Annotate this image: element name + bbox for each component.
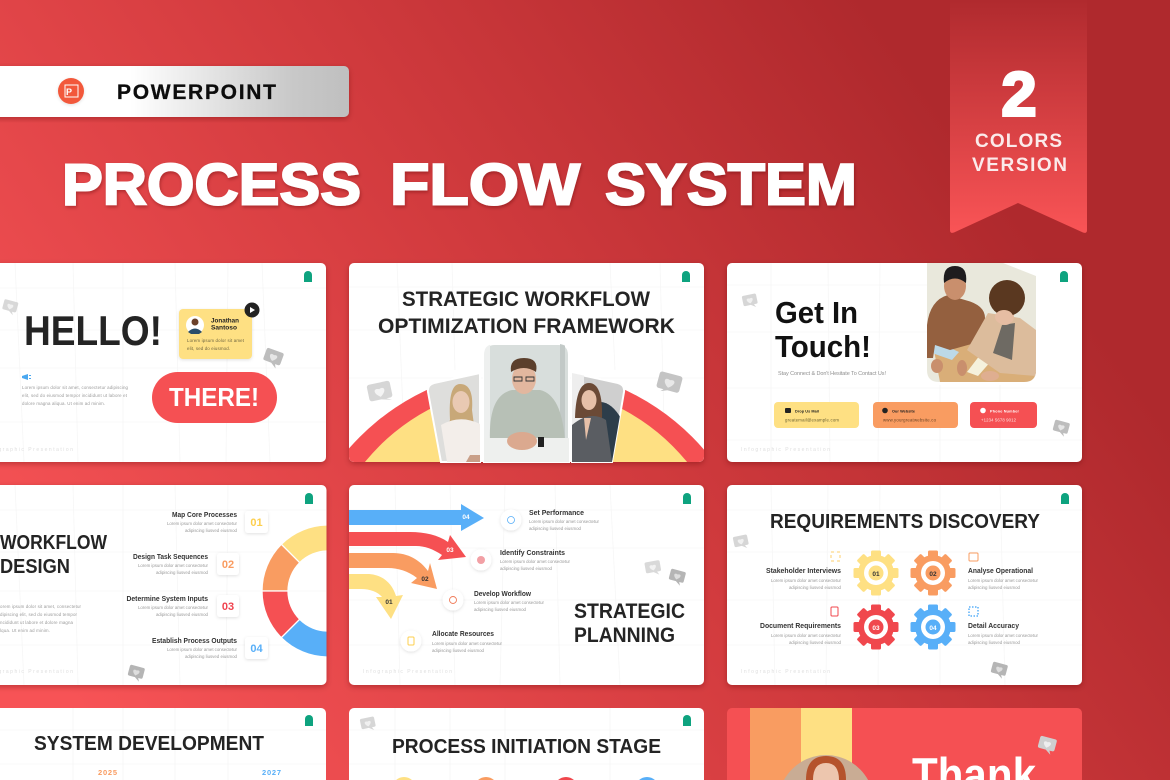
contact: mail: Drop Us Mail [795, 410, 819, 414]
gear 04 [910, 604, 956, 650]
item 02: adipiscing liusved eiusmod [156, 570, 209, 575]
title: PROCESS [62, 152, 361, 218]
heading: HELLO!: HELLO! [24, 307, 162, 354]
contact: website [873, 402, 958, 428]
item 03: 03 [222, 601, 234, 613]
icon: home badge [683, 715, 691, 726]
item 01 [167, 511, 268, 533]
step: Set Performance: Set Performance [529, 510, 584, 517]
text block: intro: Lorem ipsum dolor sit amet, consectetur adipiscing [22, 385, 129, 390]
banner: PowerPoint [0, 66, 349, 117]
ribbon number: 2 [1002, 60, 1036, 130]
panel: Get in touch slide [727, 263, 1082, 462]
item 03: Lorem ipsum dolor amet consectetur [138, 605, 209, 610]
ribbon text [972, 131, 1067, 176]
icon: home badge [305, 715, 313, 726]
item: Document Requirements: Lorem ipsum dolor amet consectetur [771, 633, 842, 638]
footer label: Infographic Presentation [741, 669, 830, 675]
heading: Get In Touch! [775, 295, 871, 364]
item: Stakeholder Interviews [766, 552, 842, 590]
contact: mail [774, 402, 859, 428]
step: Allocate Resources: adipiscing liusved eiusmod [432, 648, 485, 653]
testimonial card: elit, sed do eiusmod. [187, 346, 230, 351]
heading: framework title [378, 287, 675, 338]
icon: home badge [305, 493, 313, 504]
item 02: Design Task Sequences [133, 554, 208, 561]
photo: two colleagues [927, 263, 1036, 382]
heading: PROCESS INITIATION STAGE [392, 736, 661, 758]
heading: Workflow design: WORKFLOW [0, 531, 108, 554]
item 02 [133, 553, 239, 575]
footer label: Infographic Presentation [363, 669, 452, 675]
icon: home badge [682, 271, 690, 282]
arrow 01 yellow: 01 [385, 599, 393, 606]
item 02: Lorem ipsum dolor amet consectetur [138, 563, 209, 568]
icon: speech bubble [1052, 419, 1070, 437]
step: Set Performance: Lorem ipsum dolor amet consectetur [529, 519, 600, 524]
testimonial card: Santoso [211, 326, 237, 332]
panel: Strategic planning slide [349, 485, 704, 685]
heading: framework title: STRATEGIC WORKFLOW [402, 287, 651, 311]
gear 02: 02 [929, 571, 937, 578]
testimonial card: Lorem ipsum dolor sit amet [187, 338, 245, 343]
title [62, 152, 857, 218]
ribbon: 2 colors version [950, 0, 1087, 233]
text block: intro: lqua. Ut enim ad minim. [0, 628, 50, 633]
item: Document Requirements: adipiscing liusved eiusmod [789, 640, 842, 645]
item: Stakeholder Interviews: adipiscing liusved eiusmod [789, 585, 842, 590]
title: SYSTEM [605, 152, 857, 218]
heading: Workflow design [0, 531, 108, 578]
item: Analyse Operational: Analyse Operational [968, 568, 1033, 575]
heading: SYSTEM DEVELOPMENT [34, 733, 264, 755]
gear 03: 03 [872, 625, 880, 632]
panel: Process initiation slide [349, 708, 704, 780]
heading: Get In Touch!: Get In [775, 295, 858, 330]
icon: speech bubble [990, 661, 1008, 679]
arrow 03 red: 03 [446, 547, 454, 554]
item: Stakeholder Interviews: Lorem ipsum dolor amet consectetur [771, 578, 842, 583]
gear 01 [854, 550, 898, 596]
icon: speech bubble [668, 568, 686, 586]
icon: speech bubble [742, 293, 759, 310]
label: POWERPOINT: POWERPOINT [117, 81, 276, 104]
testimonial card: Jonathan [211, 318, 239, 324]
subtitle: Stay Connect & Don't Hesitate To Contact Us! [778, 371, 886, 377]
gear 04: 04 [929, 625, 937, 632]
ribbon text: COLORS [975, 131, 1062, 152]
yellow stripe [801, 708, 852, 780]
step: Allocate Resources: Allocate Resources [432, 631, 494, 638]
item 03 [126, 595, 239, 617]
step: Allocate Resources: Lorem ipsum dolor amet consectetur [432, 641, 503, 646]
icon: home badge [1061, 493, 1069, 504]
panel: Workflow design slide [0, 485, 328, 685]
contact: phone: +1234 5678 9012 [981, 418, 1017, 422]
heading: Strategic planning: STRATEGIC [574, 600, 685, 623]
year 2025: 2025 [98, 768, 117, 777]
item: Analyse Operational [968, 553, 1039, 590]
item: Detail Accuracy: Lorem ipsum dolor amet consectetur [968, 633, 1039, 638]
gear 01: 01 [872, 571, 880, 578]
step: Develop Workflow: Lorem ipsum dolor amet consectetur [474, 600, 545, 605]
step: Set Performance [500, 510, 600, 531]
icon: play button [244, 302, 260, 318]
text block: intro: dolore magna aliqua. Ut enim ad minim. [22, 401, 105, 406]
item 04: Establish Process Outputs [152, 638, 237, 645]
donut chart [262, 525, 328, 657]
step: Identify Constraints [470, 550, 571, 571]
contact: phone [970, 402, 1037, 428]
icon: home badge [304, 271, 312, 282]
item: Detail Accuracy: Detail Accuracy [968, 623, 1019, 630]
step: Identify Constraints: Lorem ipsum dolor amet consectetur [500, 559, 571, 564]
text block: intro [0, 604, 82, 633]
arrow 02 orange: 02 [421, 576, 429, 583]
icon: speech bubble [733, 534, 750, 551]
contact: phone: Phone Number [990, 410, 1020, 414]
title: FLOW [390, 152, 580, 218]
heading: Strategic planning: PLANNING [574, 624, 675, 647]
heading: REQUIREMENTS DISCOVERY [770, 510, 1040, 533]
panel: System development slide [0, 708, 326, 780]
icon: PowerPoint logo [58, 78, 84, 104]
item 02: 02 [222, 559, 234, 571]
gear 03 [854, 604, 898, 650]
item 03: Determine System Inputs [126, 596, 208, 603]
item: Document Requirements [760, 607, 842, 645]
heading: Get In Touch!: Touch! [775, 329, 871, 364]
item 01: Map Core Processes [172, 512, 237, 519]
step: Allocate Resources [400, 630, 503, 653]
item 04 [152, 637, 268, 659]
item: Analyse Operational: adipiscing liusved eiusmod [968, 585, 1021, 590]
panel: Hello slide [0, 263, 326, 462]
icon: speech bubble [1037, 735, 1057, 755]
yellow arc [365, 408, 687, 462]
item 03: adipiscing liusved eiusmod [156, 612, 209, 617]
item 04: 04 [250, 643, 263, 655]
pill: THERE! [152, 372, 277, 423]
item: Detail Accuracy: adipiscing liusved eiusmod [968, 640, 1021, 645]
contact: website: Our Website [892, 410, 915, 414]
footer label: Infographic Presentation [741, 447, 830, 453]
step: Develop Workflow: adipiscing liusved eiusmod [474, 607, 527, 612]
year 2027: 2027 [262, 768, 281, 777]
gear 02 [910, 550, 956, 596]
photo: right woman [572, 373, 624, 462]
panel: Strategic workflow slide [346, 262, 706, 467]
text block: intro: orem ipsum dolor sit amet, consectetur [0, 604, 82, 609]
step: Develop Workflow [442, 590, 545, 612]
testimonial card [179, 309, 252, 359]
item: Document Requirements: Document Requirements [760, 623, 841, 630]
item 04: adipiscing liusved eiusmod [185, 654, 238, 659]
text block: intro: elit, sed do eiusmod tempor incididunt ut labore et [22, 393, 128, 398]
item: Stakeholder Interviews: Stakeholder Interviews [766, 568, 841, 575]
item: Detail Accuracy [968, 607, 1039, 645]
red arc [349, 390, 704, 462]
step: Identify Constraints: Identify Constraints [500, 550, 565, 557]
icon: megaphone [22, 374, 31, 380]
step: Develop Workflow: Develop Workflow [474, 591, 532, 598]
item 01: Lorem ipsum dolor amet consectetur [167, 521, 238, 526]
icon: home badge [683, 493, 691, 504]
contact: mail: greatemail@example.com [785, 418, 839, 422]
icon: speech bubble [644, 560, 662, 577]
orange stripe [750, 708, 801, 780]
icon: speech bubble [360, 716, 377, 733]
icon: speech bubble [261, 347, 284, 370]
icon: home badge [1060, 271, 1068, 282]
icon: speech bubble [127, 664, 145, 682]
arrow 04 blue: 04 [462, 514, 470, 521]
photo: left woman [428, 373, 480, 462]
heading: Workflow design: DESIGN [0, 555, 70, 578]
icon: speech bubble left [366, 380, 393, 404]
text block: intro: dipiscing elit, sed do eiusmod tempor [0, 612, 78, 617]
photo: centre man [484, 344, 569, 462]
step dots [396, 777, 655, 780]
item 01: adipiscing liusved eiusmod [185, 528, 238, 533]
item 04: Lorem ipsum dolor amet consectetur [167, 647, 238, 652]
panel: Requirements discovery slide [727, 485, 1082, 685]
item: Analyse Operational: Lorem ipsum dolor amet consectetur [968, 578, 1039, 583]
photo: woman portrait [784, 755, 868, 780]
step: Set Performance: adipiscing liusved eiusmod [529, 526, 582, 531]
item 01: 01 [250, 517, 263, 529]
arrows [349, 504, 484, 619]
ribbon text: VERSION [972, 155, 1067, 176]
icon: PowerPoint logo: P [66, 87, 72, 97]
icon: speech bubble right [655, 371, 683, 396]
icon: speech bubble light [1, 299, 19, 316]
text block: intro: ncididunt ut labore et dolore magna [0, 620, 74, 625]
text block: intro [22, 385, 129, 406]
step: Identify Constraints: adipiscing liusved eiusmod [500, 566, 553, 571]
contact: website: www.yourgreatwebsite.co [883, 418, 937, 422]
heading: Strategic planning [574, 600, 685, 647]
panel: Thank you slide [727, 708, 1082, 780]
pill: THERE!: THERE! [169, 382, 259, 412]
heading: framework title: OPTIMIZATION FRAMEWORK [378, 314, 675, 338]
